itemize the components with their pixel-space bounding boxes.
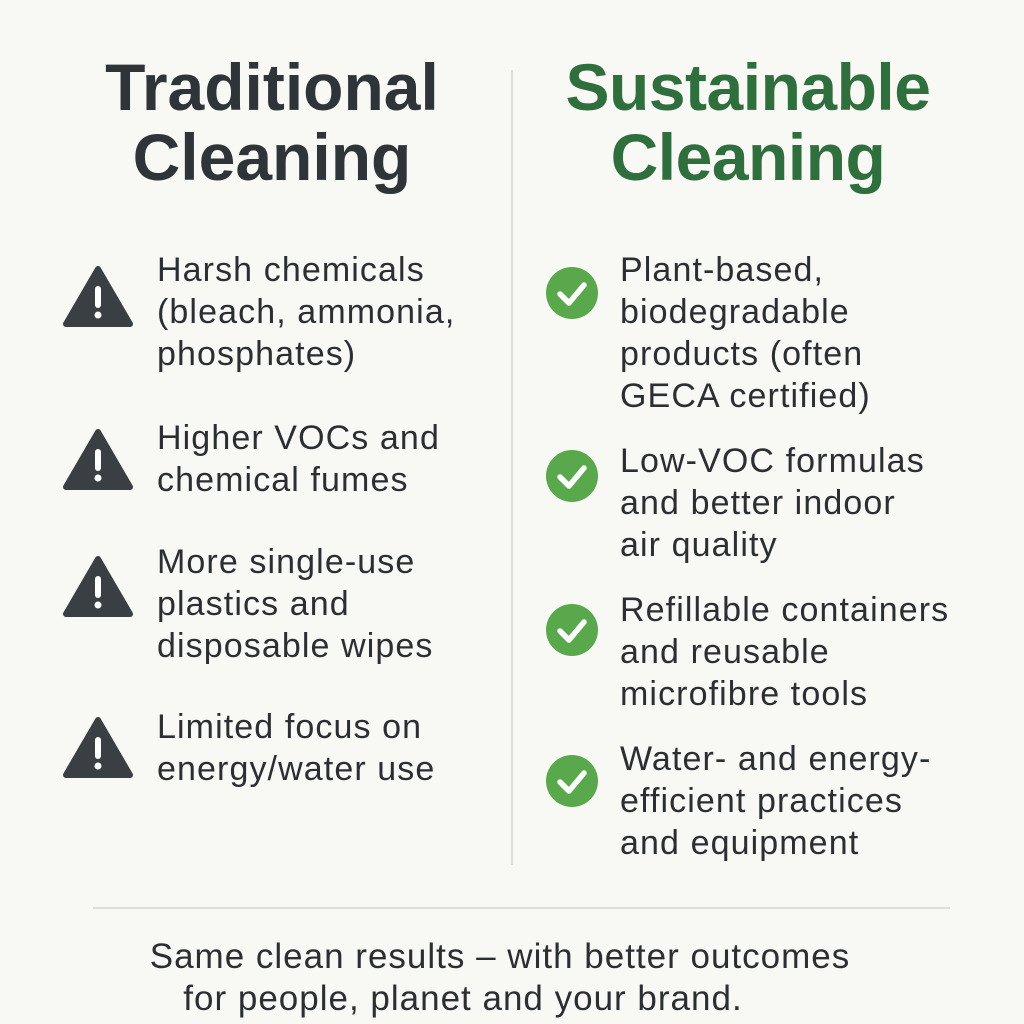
text 1: GECA certified)	[620, 377, 871, 415]
text 4	[620, 740, 931, 862]
text 1	[620, 251, 871, 415]
title: traditional: Cleaning	[133, 120, 411, 194]
title: sustainable: Sustainable	[566, 50, 930, 124]
text 2	[620, 442, 925, 564]
text 1	[157, 251, 455, 373]
footer text	[150, 937, 850, 1018]
icon: check 4	[546, 755, 598, 807]
text 2: Higher VOCs and	[157, 419, 440, 457]
text 2: Low-VOC formulas	[620, 442, 925, 480]
text 2: and better indoor	[620, 484, 896, 522]
text 3: plastics and	[157, 585, 350, 623]
text 1: (bleach, ammonia,	[157, 293, 455, 331]
text 1: Plant-based,	[620, 251, 824, 289]
icon: check 3	[546, 604, 598, 656]
icon: check 1	[546, 267, 598, 319]
footer text: for people, planet and your brand.	[183, 979, 743, 1018]
text 3: disposable wipes	[157, 627, 434, 665]
icon: warning 1	[63, 266, 133, 327]
panel: sustainable	[546, 251, 949, 862]
footer text: Same clean results – with better outcomes	[150, 937, 850, 976]
text 3: Refillable containers	[620, 591, 949, 629]
text 2: air quality	[620, 526, 778, 564]
text 3	[620, 591, 949, 713]
title: sustainable: Cleaning	[611, 120, 885, 194]
text 3: microfibre tools	[620, 675, 868, 713]
text 4: and equipment	[620, 824, 859, 862]
icon: warning 4	[63, 717, 133, 778]
text 2	[157, 419, 440, 499]
text 4: efficient practices	[620, 782, 903, 820]
text 4: energy/water use	[157, 750, 435, 788]
text 1: products (often	[620, 335, 863, 373]
title: sustainable	[566, 50, 930, 194]
title: traditional	[105, 50, 439, 194]
text 1: Harsh chemicals	[157, 251, 425, 289]
text 4: Limited focus on	[157, 708, 422, 746]
text 1: biodegradable	[620, 293, 850, 331]
icon: warning 2	[63, 429, 133, 490]
icon: check 2	[546, 450, 598, 502]
text 3	[157, 543, 434, 665]
text 3: and reusable	[620, 633, 830, 671]
text 1: phosphates)	[157, 335, 356, 373]
panel: traditional	[63, 251, 455, 788]
title: traditional: Traditional	[105, 50, 439, 124]
text 2: chemical fumes	[157, 461, 409, 499]
text 4	[157, 708, 435, 788]
icon: warning 3	[63, 556, 133, 617]
text 3: More single-use	[157, 543, 415, 581]
text 4: Water- and energy-	[620, 740, 931, 778]
